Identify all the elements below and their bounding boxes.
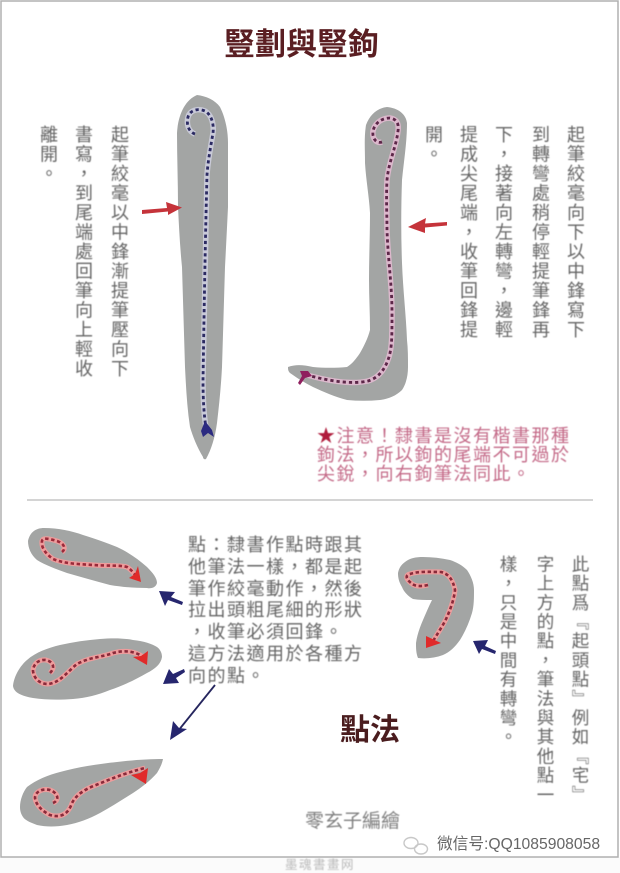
text block: dot stroke explanation: 這方法適用於各種方 xyxy=(188,644,364,664)
icon: wechat bubbles xyxy=(404,838,428,854)
text block: hook stroke, column 1: 起筆絞毫向下以中鋒寫下 xyxy=(565,125,585,340)
callout: note on hook tip xyxy=(316,426,570,484)
dot stroke 1 xyxy=(28,528,157,588)
callout: note on hook tip: 鉤法，所以鉤的尾端不可過於 xyxy=(317,445,570,465)
text block: dot stroke explanation: 筆作絞毫動作，然後 xyxy=(188,579,364,599)
text block: vertical stroke, column 2: 書寫，到尾端處回筆向上輕收 xyxy=(73,125,93,378)
text block: hook stroke, column 2: 到轉彎處稍停輕提筆鋒再 xyxy=(530,125,550,340)
bottom watermark: 墨魂書畫网 xyxy=(285,858,355,872)
dot stroke 3 xyxy=(20,759,163,826)
text block: start dot, column 3: 樣，只是中間有轉彎。 xyxy=(498,555,518,747)
text block: start dot, column 2: 字上方的點，筆法與其他點一 xyxy=(535,555,555,805)
callout: note on hook tip: ★注意！隸書是沒有楷書那種 xyxy=(317,426,570,446)
heading: dot method: 點法 xyxy=(340,714,400,747)
text block: start dot, column 1: 此點爲『起頭點』例如『宅』 xyxy=(570,555,590,805)
text block: dot stroke explanation: 向的點。 xyxy=(188,666,266,686)
navy arrow to start dot xyxy=(473,640,496,654)
text block: vertical stroke, column 3: 離開。 xyxy=(38,125,58,184)
title: 豎劃與豎鉤 xyxy=(224,27,379,62)
text block: vertical stroke, column 1: 起筆絞毫以中鋒漸提筆壓向下 xyxy=(109,125,129,378)
text block: dot stroke explanation: ，收筆必須回鋒。 xyxy=(188,622,344,642)
hook stroke shape with maroon dashed path xyxy=(288,107,408,401)
dot stroke 2 xyxy=(13,638,162,700)
text block: hook stroke, column 4: 提成尖尾端，收筆回鋒提 xyxy=(458,125,478,340)
author credit: 零玄子編繪 xyxy=(305,811,400,832)
navy arrow to dot 2 xyxy=(163,669,185,684)
long navy arrow to dot 3 xyxy=(170,685,215,740)
callout: note on hook tip: 尖銳，向右鉤筆法同此。 xyxy=(317,464,532,484)
wechat account text: 微信号:QQ1085908058 xyxy=(437,836,600,853)
text block: dot stroke explanation xyxy=(188,534,364,686)
text block: dot stroke explanation: 點：隸書作點時跟其 xyxy=(188,535,364,555)
vertical stroke shape with navy dashed path xyxy=(177,95,228,459)
navy arrow to dot 1 xyxy=(159,591,183,606)
text block: hook stroke, column 3: 下，接著向左轉彎，邊輕 xyxy=(493,125,513,340)
red arrow pointing to vertical stroke xyxy=(142,202,182,215)
text block: hook stroke, column 5: 開。 xyxy=(423,125,443,164)
text block: dot stroke explanation: 他筆法一樣，都是起 xyxy=(188,557,364,577)
text block: dot stroke explanation: 拉出頭粗尾細的形狀 xyxy=(188,600,364,620)
red arrow pointing to hook stroke xyxy=(408,218,447,233)
start dot stroke 4 xyxy=(398,557,474,658)
